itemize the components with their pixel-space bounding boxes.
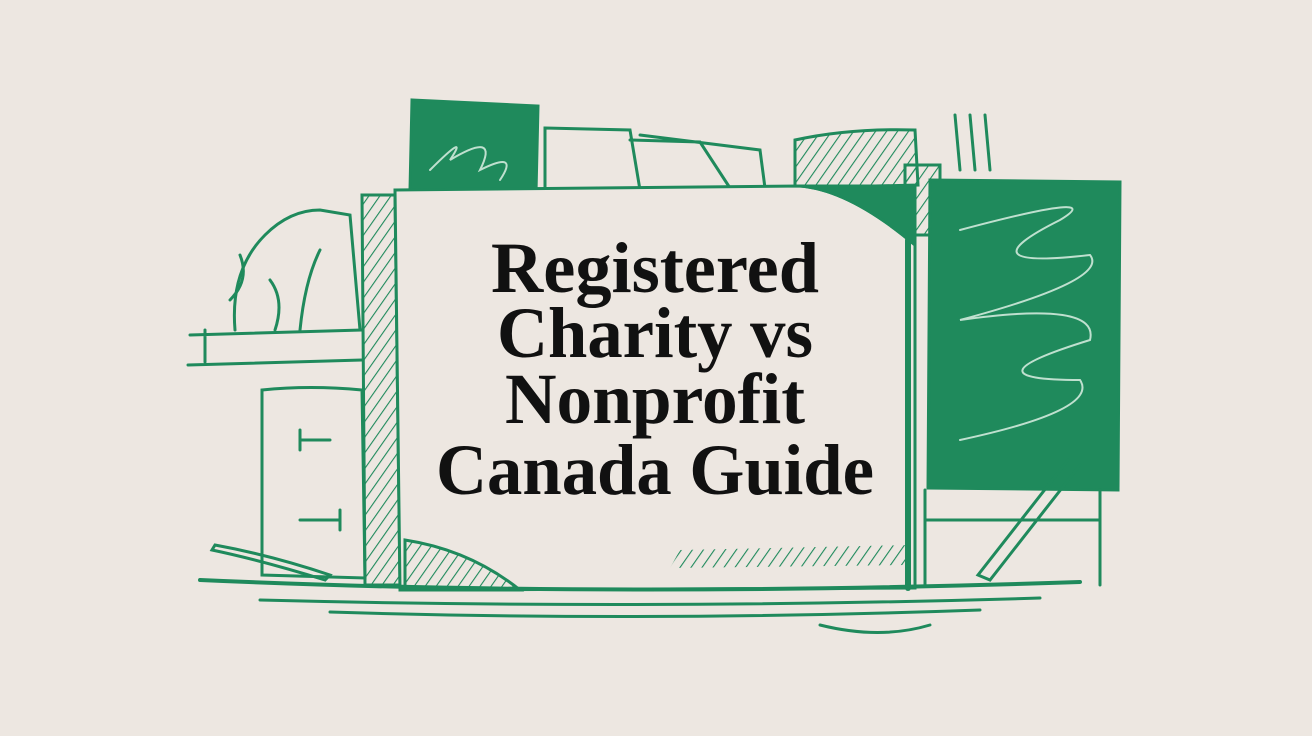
title: Nonprofit [505,359,805,439]
left jar [212,388,365,580]
ground lines [200,580,1080,632]
top boxes [545,115,990,190]
title: Registered [491,228,819,308]
right green panel [905,165,1120,585]
title [436,228,874,510]
left post hatched [362,195,400,585]
board [395,186,915,590]
title: Canada Guide [436,430,874,510]
left shelf and plant [188,210,362,365]
top dark book [410,100,538,192]
illustration: sketch scene [188,100,1120,632]
title: Charity vs [497,293,813,373]
